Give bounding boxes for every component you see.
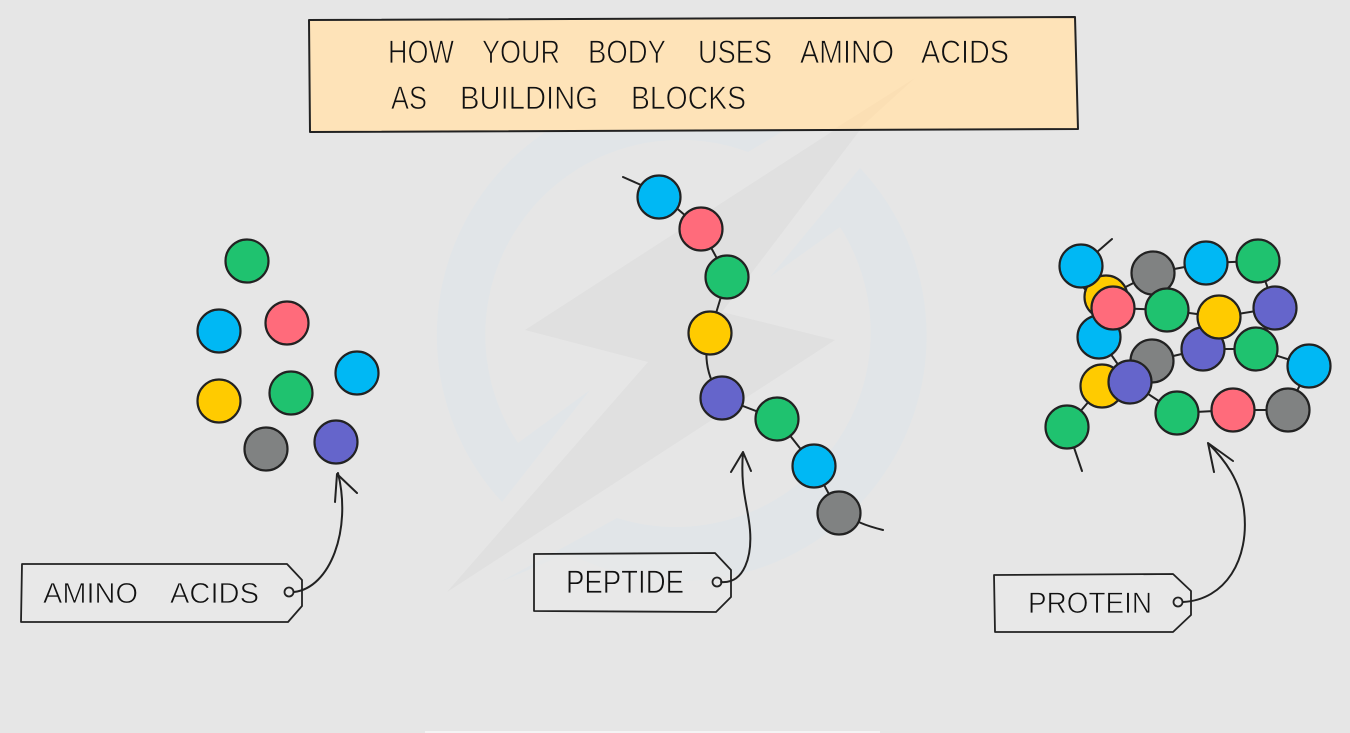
arrow: amino acids	[294, 473, 357, 592]
peptide chain	[623, 176, 883, 534]
tag: protein	[994, 574, 1191, 632]
arrow: protein	[1183, 443, 1245, 602]
title banner	[309, 17, 1078, 132]
title banner: ACIDS	[921, 34, 1009, 70]
amino acids group	[198, 240, 378, 470]
tag: protein: PROTEIN	[1028, 587, 1152, 620]
title banner: BUILDING	[460, 80, 598, 116]
title banner: BLOCKS	[631, 80, 746, 116]
title banner: AS	[391, 80, 427, 116]
title banner: BODY	[588, 34, 666, 70]
arrow: peptide	[721, 452, 751, 582]
watermark logo	[437, 78, 927, 592]
tag: amino acids: AMINO	[43, 578, 138, 610]
tag: amino acids: ACIDS	[170, 578, 259, 610]
protein folded chain	[1046, 239, 1330, 471]
tag: peptide	[534, 553, 731, 612]
tag: peptide: PEPTIDE	[566, 564, 684, 600]
title banner: HOW	[388, 34, 455, 70]
title banner: YOUR	[482, 34, 560, 70]
title banner: AMINO	[800, 34, 894, 70]
tag: amino acids	[21, 564, 302, 622]
title banner: USES	[698, 34, 772, 70]
